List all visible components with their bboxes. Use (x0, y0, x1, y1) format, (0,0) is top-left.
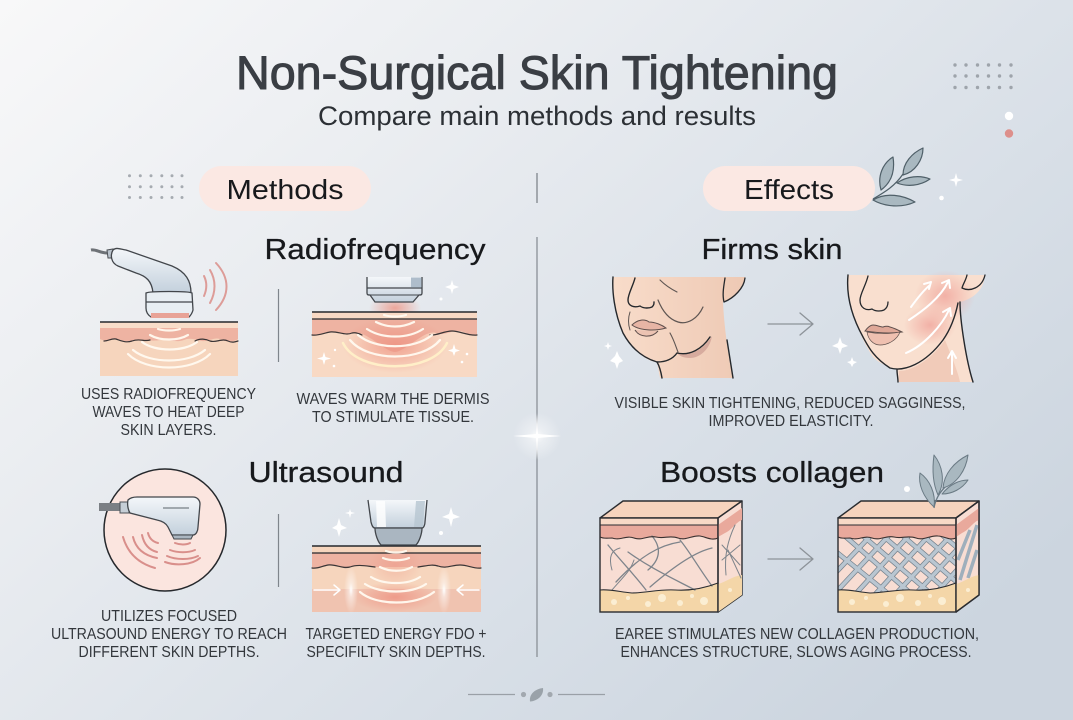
caption: RF left: USES RADIOFREQUENCY (81, 386, 256, 403)
icon: aged face sparkles (604, 342, 623, 369)
caption: boosts collagen: EAREE STIMULATES NEW COLLAGEN PRODUCTION, (615, 626, 979, 643)
caption: firms skin (614, 395, 966, 430)
decoration: white and red dots (1005, 112, 1013, 138)
caption: ultrasound left: DIFFERENT SKIN DEPTHS. (78, 644, 260, 661)
title: Non-Surgical Skin Tightening (236, 46, 838, 99)
caption: RF right: WAVES WARM THE DERMIS (296, 391, 490, 408)
caption: firms skin: IMPROVED ELASTICITY. (708, 413, 874, 430)
decoration: top-right dots (953, 63, 1013, 89)
caption: ultrasound left (51, 608, 287, 661)
subtitle: Compare main methods and results (318, 101, 756, 131)
decoration: center glow star (513, 412, 561, 460)
caption: ultrasound right: SPECIFILTY SKIN DEPTHS. (306, 644, 486, 661)
illustration: RF skin cross-section (100, 322, 238, 376)
icon: leaf sprig on cube (920, 455, 968, 508)
caption: RF right: TO STIMULATE TISSUE. (312, 409, 474, 426)
decoration: RF sparkles (440, 280, 459, 300)
decoration: methods dots (128, 174, 184, 199)
illustration: skin cube before (600, 501, 742, 612)
heading pill: Effects: Effects (744, 174, 834, 205)
divider (278, 514, 280, 587)
footer ornament (468, 688, 605, 702)
caption: ultrasound left: UTILIZES FOCUSED (101, 608, 237, 625)
decoration: sparkle (939, 173, 963, 200)
illustration: skin cube after (824, 501, 979, 612)
heading: Boosts collagen: Boosts collagen (660, 457, 884, 489)
illustration: ultrasound probe and focused energy (312, 500, 481, 614)
caption: firms skin: VISIBLE SKIN TIGHTENING, REDUCED SAGGINESS, (614, 395, 966, 412)
illustration: RF probe warming dermis (312, 277, 477, 377)
illustration: aged face (613, 277, 745, 378)
icon: leaf sprig (873, 148, 930, 206)
caption: ultrasound left: ULTRASOUND ENERGY TO REACH (51, 626, 287, 643)
decoration: white dot (904, 486, 910, 492)
caption: ultrasound right: TARGETED ENERGY FDO + (306, 626, 487, 643)
illustration: tightened face (848, 270, 985, 382)
arrow (768, 313, 813, 335)
divider (278, 289, 280, 362)
heading: Radiofrequency: Radiofrequency (264, 234, 486, 266)
icon: radio waves (204, 263, 226, 310)
center divider (536, 173, 538, 657)
icon: radiofrequency handpiece (91, 248, 193, 318)
icon: tightened face sparkles (832, 337, 857, 367)
heading pill: Methods (199, 166, 371, 211)
caption: RF left: WAVES TO HEAT DEEP (92, 404, 244, 421)
arrow (768, 548, 813, 570)
caption: RF left (81, 386, 256, 439)
heading pill: Effects (703, 166, 875, 211)
caption: RF left: SKIN LAYERS. (120, 422, 216, 439)
caption: boosts collagen (615, 626, 979, 661)
decoration: ultrasound sparkles (332, 507, 460, 537)
heading: Ultrasound: Ultrasound (248, 457, 404, 489)
caption: ultrasound right (306, 626, 487, 661)
caption: RF right (296, 391, 490, 426)
icon: ultrasound handpiece in circle (99, 469, 226, 591)
heading: Firms skin: Firms skin (702, 234, 842, 266)
caption: boosts collagen: ENHANCES STRUCTURE, SLOWS AGING PROCESS. (620, 644, 972, 661)
heading pill: Methods: Methods (226, 174, 344, 205)
